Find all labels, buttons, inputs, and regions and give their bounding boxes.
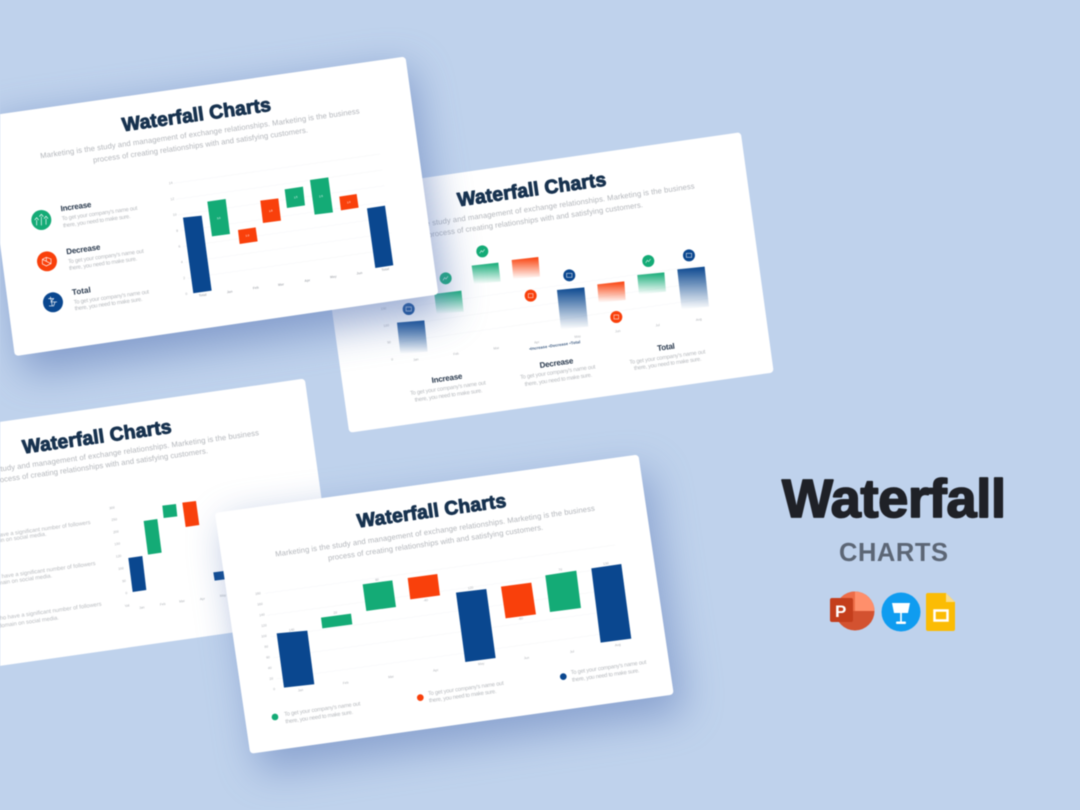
slide 4 waterfall chart: 20 <box>333 610 338 615</box>
slide 3 waterfall chart: 200 <box>113 530 119 534</box>
slide 2 subtitle: process of creating relationships with and satisfying customers. <box>427 200 643 239</box>
slide 4 waterfall chart: 120 <box>468 586 474 590</box>
slide 1 subtitle: process of creating relationships with and satisfying customers. <box>92 126 308 165</box>
slide 3 waterfall chart: 0 <box>125 591 128 595</box>
slide 4 waterfall chart: -40 <box>423 598 428 603</box>
slide 4 waterfall chart: 180 <box>255 591 261 596</box>
legend: total <box>43 285 150 312</box>
panel: slide 2 gradient waterfall <box>320 136 770 429</box>
slide 4 waterfall chart: Jan <box>298 688 304 693</box>
slide 3 waterfall chart: Apr <box>200 596 206 601</box>
slide 1 subtitle: Marketing is the study and management of exchange relationships. Marketing is the business <box>40 107 360 160</box>
slide 2 text: total: there, you need to make sure. <box>634 356 702 372</box>
slide 2 text: increase <box>410 372 487 404</box>
slide 4 waterfall chart: 160 <box>257 602 263 607</box>
slide 1 background <box>0 61 434 352</box>
slide 3 waterfall chart: 120 <box>116 554 122 559</box>
legend item: increase <box>272 701 361 725</box>
panel: slide 3 side text waterfall <box>0 383 334 674</box>
legend: total: To get your company's name out <box>73 289 150 306</box>
slide 3 descriptions <box>0 520 102 630</box>
slide 2 text: total: Total <box>657 342 675 353</box>
slide 2 text: decrease <box>520 356 596 388</box>
slide 4 waterfall chart: Mar <box>388 674 395 679</box>
slide 4 waterfall chart: Jun <box>524 656 530 660</box>
slide 2 waterfall chart: Apr <box>534 340 540 345</box>
slide 3 title: Waterfall Charts <box>21 417 173 459</box>
panel: slide 1 icon legend waterfall <box>0 61 434 352</box>
slide 1 waterfall chart: Jun <box>356 271 363 276</box>
slide 3 waterfall chart: 100 <box>118 566 124 571</box>
slide 4 waterfall chart: 140 <box>259 613 265 617</box>
slide 1 waterfall chart: May <box>330 274 337 279</box>
legend: decrease: Decrease <box>66 243 101 256</box>
slide 2 title: Waterfall Charts <box>456 170 608 211</box>
legend item: total: there, you need to make sure. <box>572 668 640 684</box>
slide 2 waterfall chart <box>381 245 709 362</box>
slide 3 background <box>0 383 334 674</box>
slide 2 text: total: To get your company's name out <box>629 349 706 366</box>
panel: slide 4 bottom legend waterfall <box>219 459 670 750</box>
subtitle: charts: CHARTS <box>839 539 948 567</box>
slide 1 waterfall chart: Apr <box>304 278 311 283</box>
legend: total: Total <box>71 285 91 297</box>
icon: PowerPoint <box>830 592 874 630</box>
slide 2 waterfall chart: Jan <box>413 357 419 362</box>
slide 2 waterfall chart: 150 <box>381 306 387 311</box>
legend item: decrease <box>417 681 505 704</box>
slide 4 waterfall chart: 130 <box>603 561 609 566</box>
slide 3 waterfall chart: 150 <box>114 542 120 546</box>
slide 1 waterfall chart: Total <box>199 293 207 298</box>
slide 4 waterfall chart: Jul <box>570 649 575 654</box>
slide 2 text: total <box>629 342 706 372</box>
slide 3 waterfall chart: Mar <box>179 599 186 604</box>
legend: decrease: To get your company's name out <box>68 249 145 265</box>
slide 1 waterfall chart <box>169 177 393 298</box>
slide 1 waterfall chart: 1.5 <box>294 195 298 199</box>
slide 4 waterfall chart: 140 <box>289 628 295 632</box>
slide 4 waterfall chart: 0 <box>273 687 275 691</box>
slide 2 waterfall chart: 50 <box>387 340 391 345</box>
slide 4 waterfall chart: 20 <box>269 676 274 681</box>
slide 3 waterfall chart: Jan <box>139 605 145 610</box>
slide 1 waterfall chart: 12 <box>170 197 175 201</box>
legend: decrease: there, you need to make sure. <box>69 256 138 272</box>
slide 4 waterfall chart: 100 <box>261 634 267 639</box>
slide 2 waterfall chart: May <box>574 334 581 339</box>
slide 2 text: decrease: Decrease <box>539 356 574 370</box>
legend: increase: there, you need to make sure. <box>63 214 131 229</box>
slide 1 waterfall chart: 1.0 <box>347 200 351 204</box>
legend item: total: To get your company's name out <box>570 660 647 676</box>
legend item: increase: there, you need to make sure. <box>285 710 354 725</box>
slide 1 waterfall chart: 1.8 <box>269 208 273 213</box>
slide 4 waterfall chart: 120 <box>261 623 267 628</box>
slide 1 waterfall chart: Jan <box>227 290 233 294</box>
slide 4 waterfall chart: 80 <box>264 644 269 649</box>
slide 2 waterfall chart: Feb <box>453 352 459 356</box>
slide 1 waterfall chart: 4 <box>181 260 183 264</box>
icon: PowerPoint: P <box>835 602 846 621</box>
icon: Keynote <box>882 592 920 632</box>
slide 1 waterfall chart: 2 <box>183 276 185 280</box>
slide 2 waterfall chart: 100 <box>383 323 389 328</box>
legend: increase: To get your company's name out <box>61 206 138 222</box>
slide 2 waterfall chart: Aug <box>696 317 702 322</box>
legend: increase <box>31 200 138 230</box>
slide 1 waterfall chart: 14 <box>169 181 173 185</box>
slide 2 text: increase: Increase <box>431 372 464 385</box>
slide 1 waterfall chart: Mar <box>278 282 285 287</box>
icon: Google Slides <box>926 593 955 631</box>
slide 2 background <box>320 136 770 429</box>
slide 2 waterfall chart: Mar <box>493 346 500 351</box>
legend item: decrease: there, you need to make sure. <box>429 689 497 704</box>
slide 3 waterfall chart: 250 <box>111 517 117 522</box>
slide 1 waterfall chart: 10 <box>173 212 177 217</box>
slide 3 waterfall chart: May <box>220 593 227 598</box>
slide 2 chart legend: ▪Increase ▪Decrease ▪Total <box>529 339 581 351</box>
slide 3 waterfall chart: Feb <box>160 602 166 607</box>
slide 1 waterfall chart: 8 <box>176 229 178 233</box>
slide 2 text: decrease: there, you need to make sure. <box>524 372 593 388</box>
slide 1 waterfall chart: 0 <box>185 292 188 296</box>
slide 2 subtitle: Marketing is the study and management of exchange relationships. Marketing is the business <box>375 182 695 235</box>
slide 4 waterfall chart: Feb <box>343 681 349 685</box>
slide 1 waterfall chart: 3.0 <box>217 216 221 220</box>
slide 2 waterfall chart: Jul <box>655 323 660 328</box>
slide 1 waterfall chart: Feb <box>253 286 259 290</box>
slide 4 waterfall chart: 40 <box>268 666 272 670</box>
main title: Waterfall <box>782 469 1006 529</box>
slide 4 waterfall chart: 60 <box>375 577 379 582</box>
slide 4 background <box>219 459 670 750</box>
slide 1 title: Waterfall Charts <box>121 95 272 136</box>
slide 4 title: Waterfall Charts <box>356 491 508 533</box>
legend: increase: Increase <box>60 200 93 213</box>
slide 1 waterfall chart: 2.6 <box>319 194 324 198</box>
slide 2 waterfall chart: Jun <box>615 329 621 334</box>
slide 2 text: increase: To get your company's name out <box>410 380 487 397</box>
slide 3 waterfall chart: Val <box>125 603 130 608</box>
slide 2 text: increase: there, you need to make sure. <box>414 388 483 404</box>
slide 3 waterfall chart: 50 <box>122 579 126 583</box>
slide 3 waterfall chart <box>109 501 227 610</box>
slide 1 waterfall chart: 6 <box>178 244 181 249</box>
legend: decrease <box>37 243 145 272</box>
legend item: increase: To get your company's name out <box>284 701 361 718</box>
legend item: decrease: To get your company's name out <box>428 681 505 697</box>
legend: total: there, you need to make sure. <box>74 297 143 312</box>
slide 1 waterfall chart: 1.0 <box>245 233 250 238</box>
slide 4 waterfall chart: May <box>478 661 485 666</box>
slide 4 waterfall chart <box>255 561 631 693</box>
slide 4 waterfall chart: 70 <box>558 567 563 572</box>
slide 4 waterfall chart: Aug <box>615 642 621 647</box>
slide 1 waterfall chart: Total <box>381 267 389 272</box>
slide 4 subtitle: process of creating relationships with and satisfying customers. <box>327 523 544 563</box>
slide 2 text: decrease: To get your company's name out <box>520 364 596 381</box>
slide 4 waterfall chart: Apr <box>433 668 439 673</box>
slide 4 subtitle: Marketing is the study and management of exchange relationships. Marketing is the business <box>275 504 595 559</box>
slide 2 waterfall chart: 0 <box>391 357 393 362</box>
slide 4 waterfall chart: -60 <box>518 616 523 621</box>
slide 4 waterfall chart: 60 <box>266 655 270 660</box>
legend item: total <box>560 660 647 684</box>
slide 3 waterfall chart: 300 <box>109 506 115 510</box>
